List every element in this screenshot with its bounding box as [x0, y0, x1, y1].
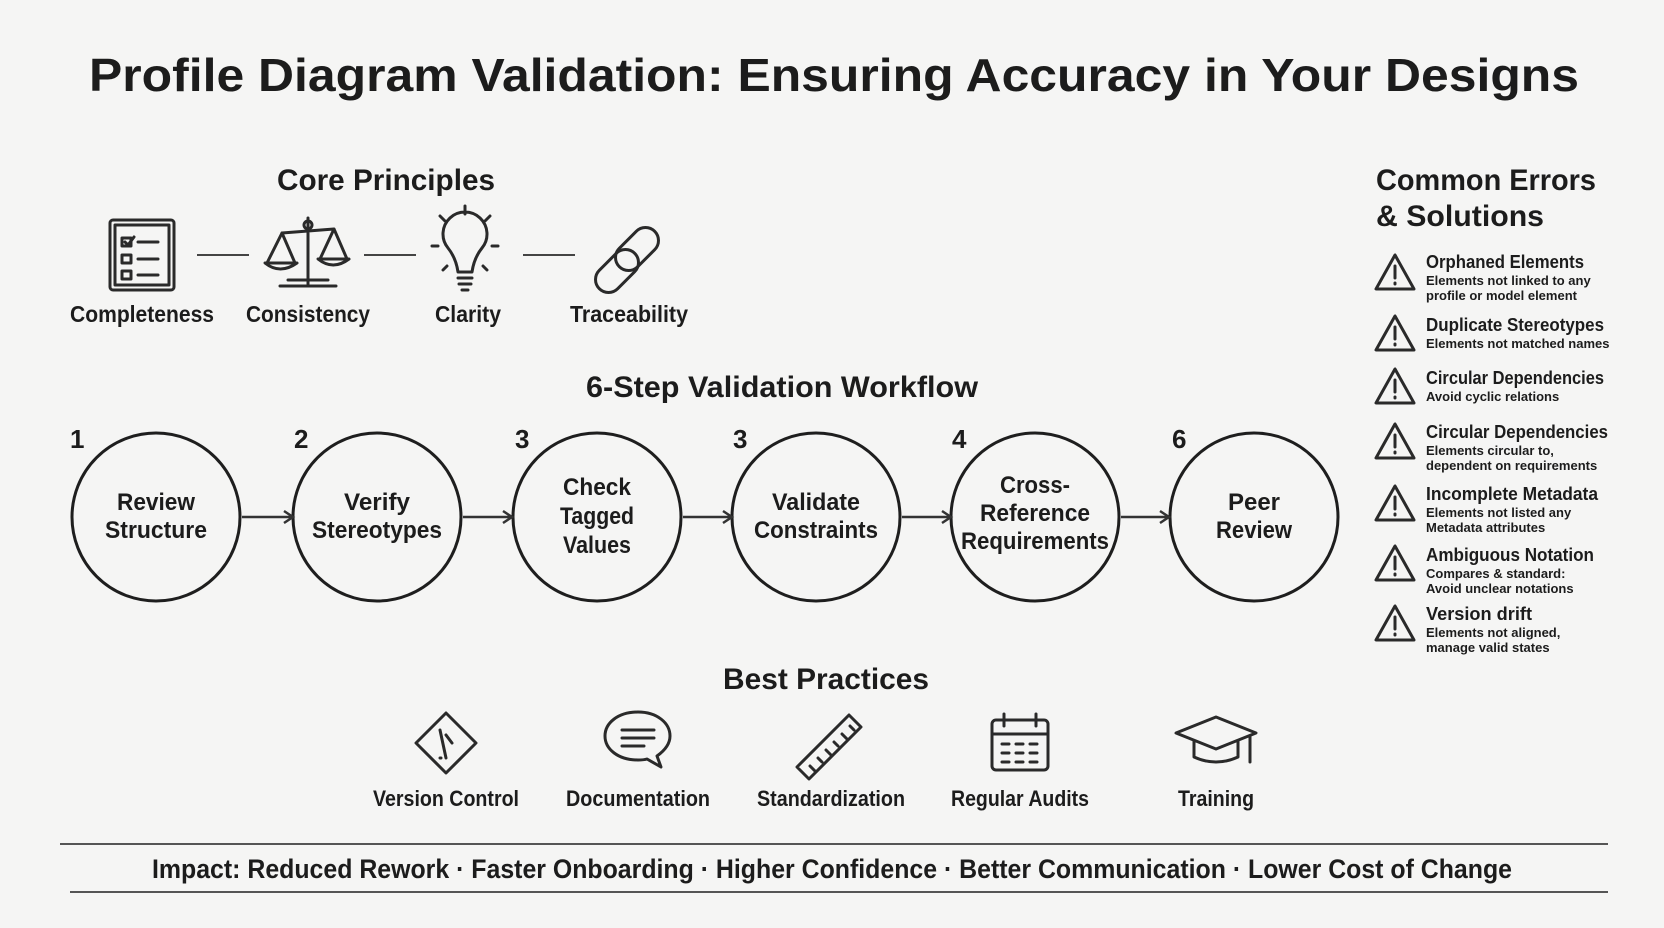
panel: errors list: Duplicate Stereotypes [1426, 315, 1604, 335]
step numbers: 1 [70, 424, 84, 454]
connector [197, 254, 575, 256]
icon: scales [265, 218, 349, 286]
step labels: Values [563, 532, 631, 559]
arrows [242, 511, 1169, 523]
icon: checklist [110, 220, 174, 290]
labels: Completeness [70, 301, 214, 327]
title: Profile Diagram Validation: Ensuring Accuracy in Your Designs [89, 49, 1579, 101]
panel: errors list: Circular Dependencies [1426, 368, 1604, 388]
labels: Standardization [757, 786, 905, 811]
step labels: Review [117, 489, 195, 516]
icon: light bulb [432, 206, 498, 290]
divider lines [60, 844, 1608, 892]
panel: errors list: profile or model element [1426, 288, 1578, 303]
panel: errors list: manage valid states [1426, 640, 1550, 655]
step labels: Constraints [754, 517, 878, 544]
labels: Version Control [373, 786, 519, 811]
step labels: Stereotypes [312, 517, 442, 544]
panel: best practices [373, 712, 1256, 811]
step numbers [70, 424, 1186, 454]
step numbers: 4 [952, 424, 967, 454]
step numbers: 6 [1172, 424, 1186, 454]
heading: common errors [1376, 164, 1596, 233]
step numbers: 3 [733, 424, 747, 454]
step labels: Requirements [961, 528, 1109, 555]
panel: errors list: Ambiguous Notation [1426, 545, 1594, 565]
panel: errors list: Elements circular to, [1426, 443, 1554, 458]
icon: speech bubble [605, 712, 670, 767]
panel: core principles: Traceability [570, 301, 688, 327]
step numbers: 2 [294, 424, 308, 454]
panel: errors list: Avoid unclear notations [1426, 581, 1574, 596]
panel: workflow [70, 424, 1338, 601]
step numbers: 3 [515, 424, 529, 454]
step labels: Check [563, 474, 632, 501]
panel: errors list: Incomplete Metadata [1426, 484, 1599, 504]
panel: errors list: Orphaned Elements [1426, 252, 1584, 272]
panel: errors list: Elements not matched names [1426, 336, 1610, 351]
step labels: Validate [772, 489, 860, 516]
impact line: Impact: Reduced Rework · Faster Onboarding · Higher Confidence · Better Communication · Lower Cost of Change [152, 854, 1512, 884]
heading: common errors: Common Errors [1376, 164, 1596, 197]
step labels: Structure [105, 517, 207, 544]
panel: errors list: Circular Dependencies [1426, 422, 1608, 442]
panel: errors list: Elements not linked to any [1426, 273, 1591, 288]
panel: errors list [1376, 252, 1610, 655]
step labels: Peer [1228, 489, 1280, 516]
panel: core principles [70, 206, 688, 327]
icon: graduation cap [1176, 717, 1256, 762]
panel: errors list: Compares & standard: [1426, 566, 1565, 581]
step labels [105, 472, 1292, 559]
panel: core principles: Consistency [246, 301, 370, 327]
heading: best practices: Best Practices [723, 663, 929, 696]
panel: errors list: Elements not listed any [1426, 505, 1572, 520]
panel: errors list: Elements not aligned, [1426, 625, 1560, 640]
step labels: Tagged [560, 503, 634, 530]
heading: common errors: & Solutions [1376, 200, 1544, 233]
labels: Documentation [566, 786, 710, 811]
labels [373, 786, 1254, 811]
panel: errors list: Version drift [1426, 604, 1532, 624]
panel: core principles: Clarity [435, 301, 501, 327]
icon: calendar [992, 714, 1048, 770]
step labels: Verify [344, 489, 411, 516]
step labels: Cross- [1000, 472, 1070, 499]
step labels: Reference [980, 500, 1090, 527]
labels: Training [1178, 786, 1254, 811]
icon: ruler [797, 715, 861, 779]
heading: core principles: Core Principles [277, 164, 495, 197]
icon: version control [416, 713, 476, 773]
labels: Regular Audits [951, 786, 1089, 811]
icon: chain link [590, 222, 664, 298]
panel: errors list: Metadata attributes [1426, 520, 1545, 535]
heading: workflow: 6-Step Validation Workflow [586, 371, 979, 404]
panel: errors list: Avoid cyclic relations [1426, 389, 1559, 404]
panel: errors list: dependent on requirements [1426, 458, 1597, 473]
step labels: Review [1216, 517, 1292, 544]
